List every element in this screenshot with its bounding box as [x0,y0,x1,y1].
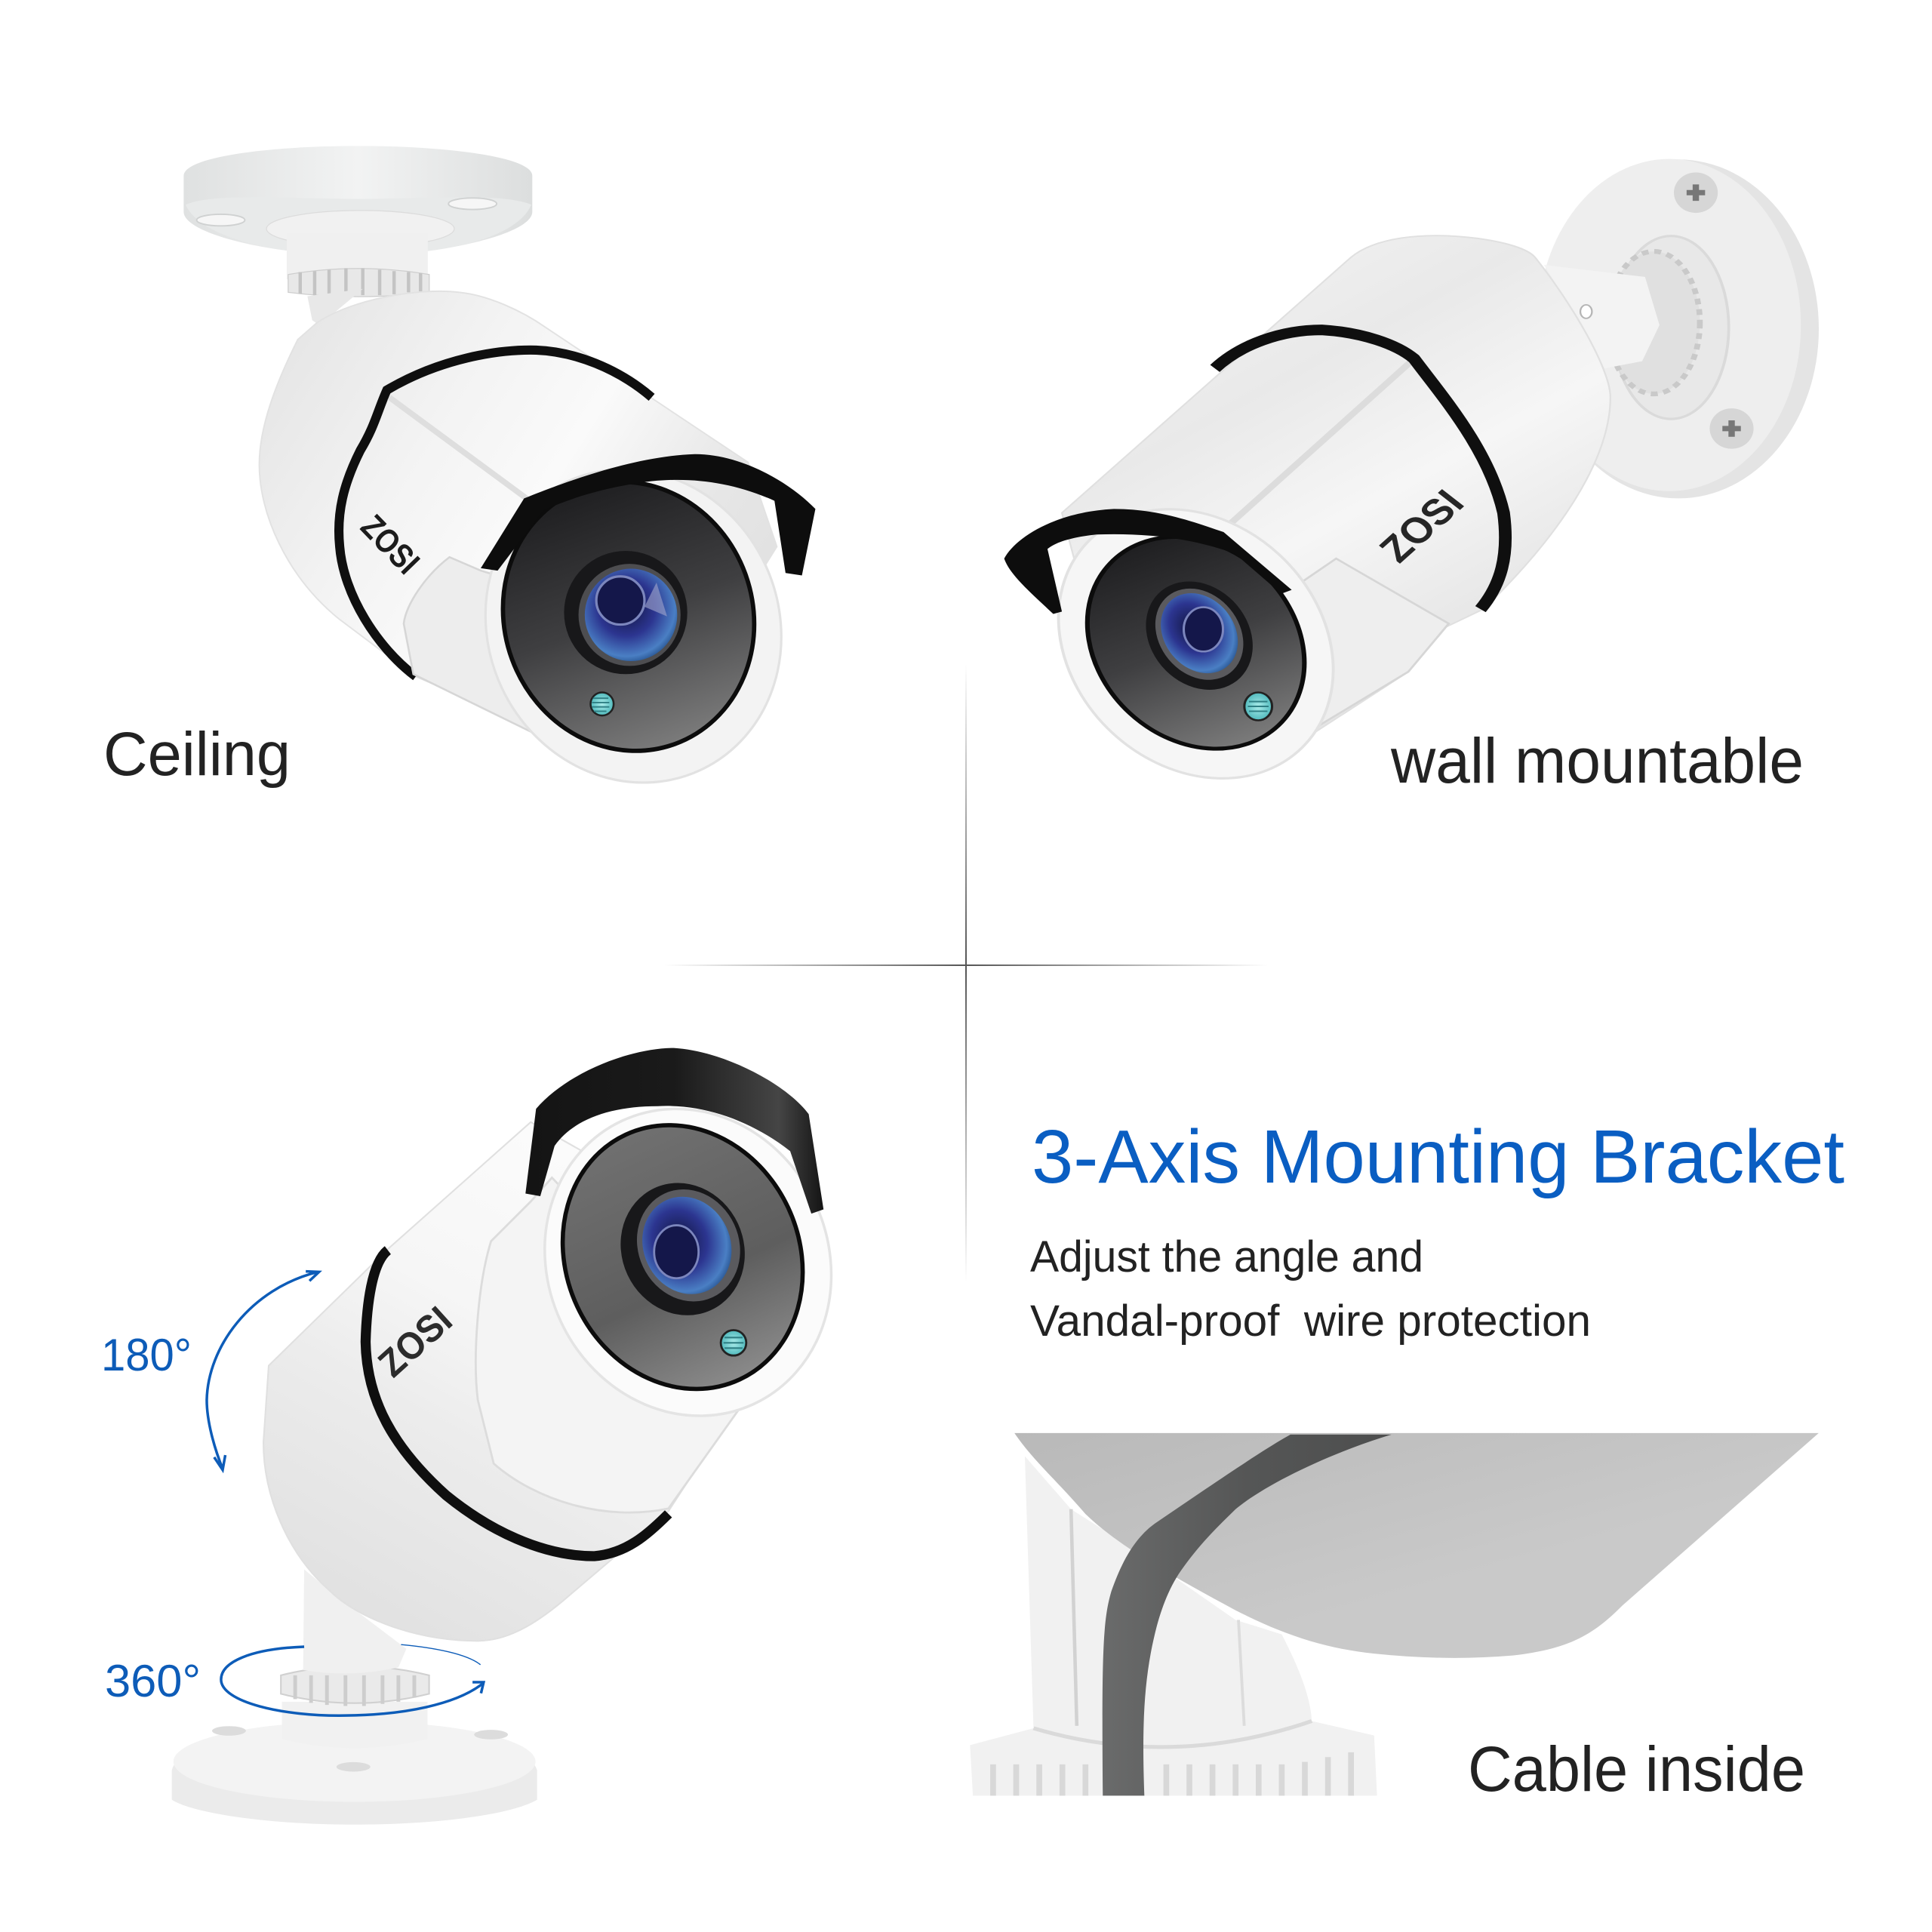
ZOSI logo: ZOSI [1371,483,1473,570]
wall mounting plate [1537,159,1819,498]
front ring [495,1062,881,1463]
bracket post [303,1570,406,1673]
ZOSI logo: ZOSI [353,508,426,581]
lens face [1047,507,1345,779]
sun shield panel line [404,557,560,734]
camera: adjustable with rotation arrows [172,1048,881,1825]
bracket close-up [970,1457,1377,1795]
label: 180 degrees: 180° [101,1330,192,1380]
heading: 3-Axis Mounting Bracket: 3-Axis Mounting Bracket [1032,1115,1844,1199]
front ring [1008,472,1384,816]
lens [1128,568,1272,703]
ZOSI logo: ZOSI [370,1298,460,1385]
arrow: 180 degree tilt [207,1272,319,1470]
sun visor [1004,509,1292,614]
sun shield panel line [1287,558,1449,734]
description text [1030,1232,1591,1346]
IR sensor [1244,693,1272,721]
camera underside [1014,1433,1819,1658]
lens [599,1162,766,1336]
text: wall mountable: wall mountable [1390,725,1804,796]
housing black seam [365,1251,669,1556]
camera: wall mounted [1004,159,1819,816]
cable [1103,1435,1392,1795]
lens face [520,1085,845,1429]
text: Ceiling: Ceiling [103,720,291,789]
IR sensor [721,1330,746,1355]
panel: cable inside close-up [970,1433,1819,1795]
camera: ceiling mounted [183,146,832,832]
camera housing [260,291,777,777]
description text: Vandal-proof wire protection [1030,1297,1591,1346]
base plate [172,1720,537,1825]
housing black seam [1215,330,1506,609]
camera housing [263,1122,817,1641]
sun shield panel line [475,1177,753,1512]
text: Cable inside: Cable inside [1468,1734,1805,1804]
sun visor [525,1048,823,1214]
housing black seam [339,350,652,676]
arrow: 360 degree rotation [221,1644,484,1715]
camera housing [1062,235,1611,739]
sun visor [481,454,815,575]
description text: Adjust the angle and [1030,1232,1423,1281]
cross divider [664,664,1268,1282]
bracket arm and collar [1544,251,1700,394]
IR sensor [590,693,614,715]
mounting screws [1674,172,1754,449]
front ring [435,420,832,832]
label: 360 degrees: 360° [105,1656,201,1706]
bracket post and collar [287,234,429,325]
lens face [466,446,792,786]
collar and neck [281,1666,429,1748]
lens [564,551,688,674]
ceiling mounting plate [183,146,532,255]
